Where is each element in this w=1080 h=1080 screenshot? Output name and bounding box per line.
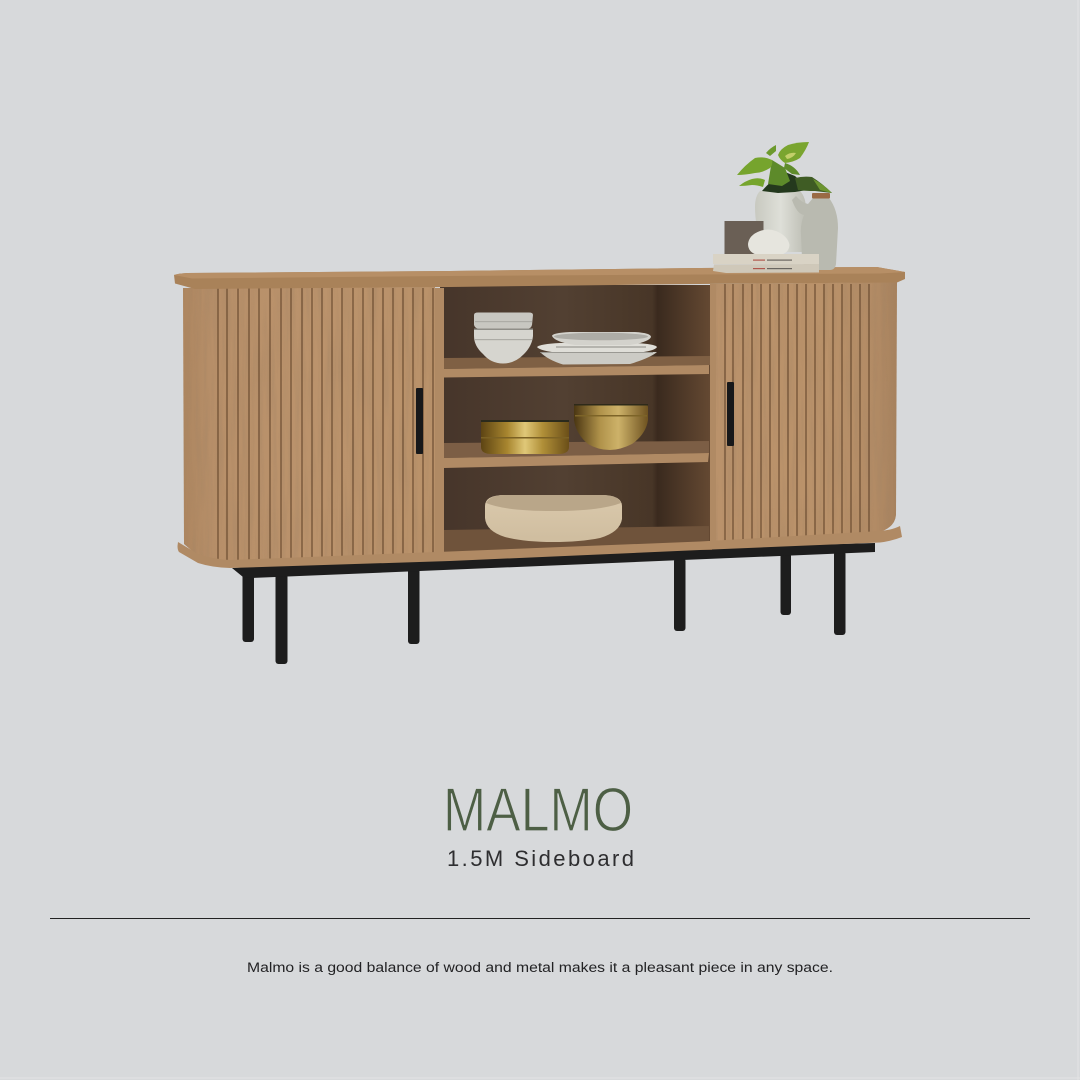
- centre carcass side panels: [435, 284, 718, 553]
- subtitle: 1.5M Sideboard: [447, 846, 634, 871]
- gold dish: [481, 420, 569, 454]
- stacked plates: [537, 332, 657, 364]
- divider: [50, 918, 1030, 919]
- stone bottle: [792, 193, 838, 270]
- metal base frame and legs: [232, 543, 875, 664]
- door handle: [416, 388, 423, 454]
- stacked books: [713, 254, 819, 273]
- right tambour door: [716, 282, 897, 542]
- title: MALMO: MALMO: [443, 776, 633, 845]
- decor on top of sideboard: [713, 142, 838, 273]
- door handle: [727, 382, 734, 446]
- gold bowl: [574, 404, 648, 450]
- large ceramic vase: [755, 191, 806, 252]
- small white vase: [748, 230, 790, 255]
- white bowls: [474, 312, 533, 364]
- plant: [737, 142, 832, 193]
- sideboard: [174, 267, 905, 664]
- top board: [174, 267, 905, 289]
- open shelving interior: [440, 285, 712, 553]
- bottom plinth board: [178, 526, 902, 568]
- left tambour door: [183, 287, 435, 562]
- brown block: [724, 221, 764, 254]
- shelf 2: [444, 441, 709, 468]
- shelf 1: [444, 356, 710, 378]
- shelf 3 surface: [444, 526, 709, 553]
- cream serving dish: [485, 495, 622, 542]
- description: Malmo is a good balance of wood and metal makes it a pleasant piece in any space.: [247, 960, 833, 975]
